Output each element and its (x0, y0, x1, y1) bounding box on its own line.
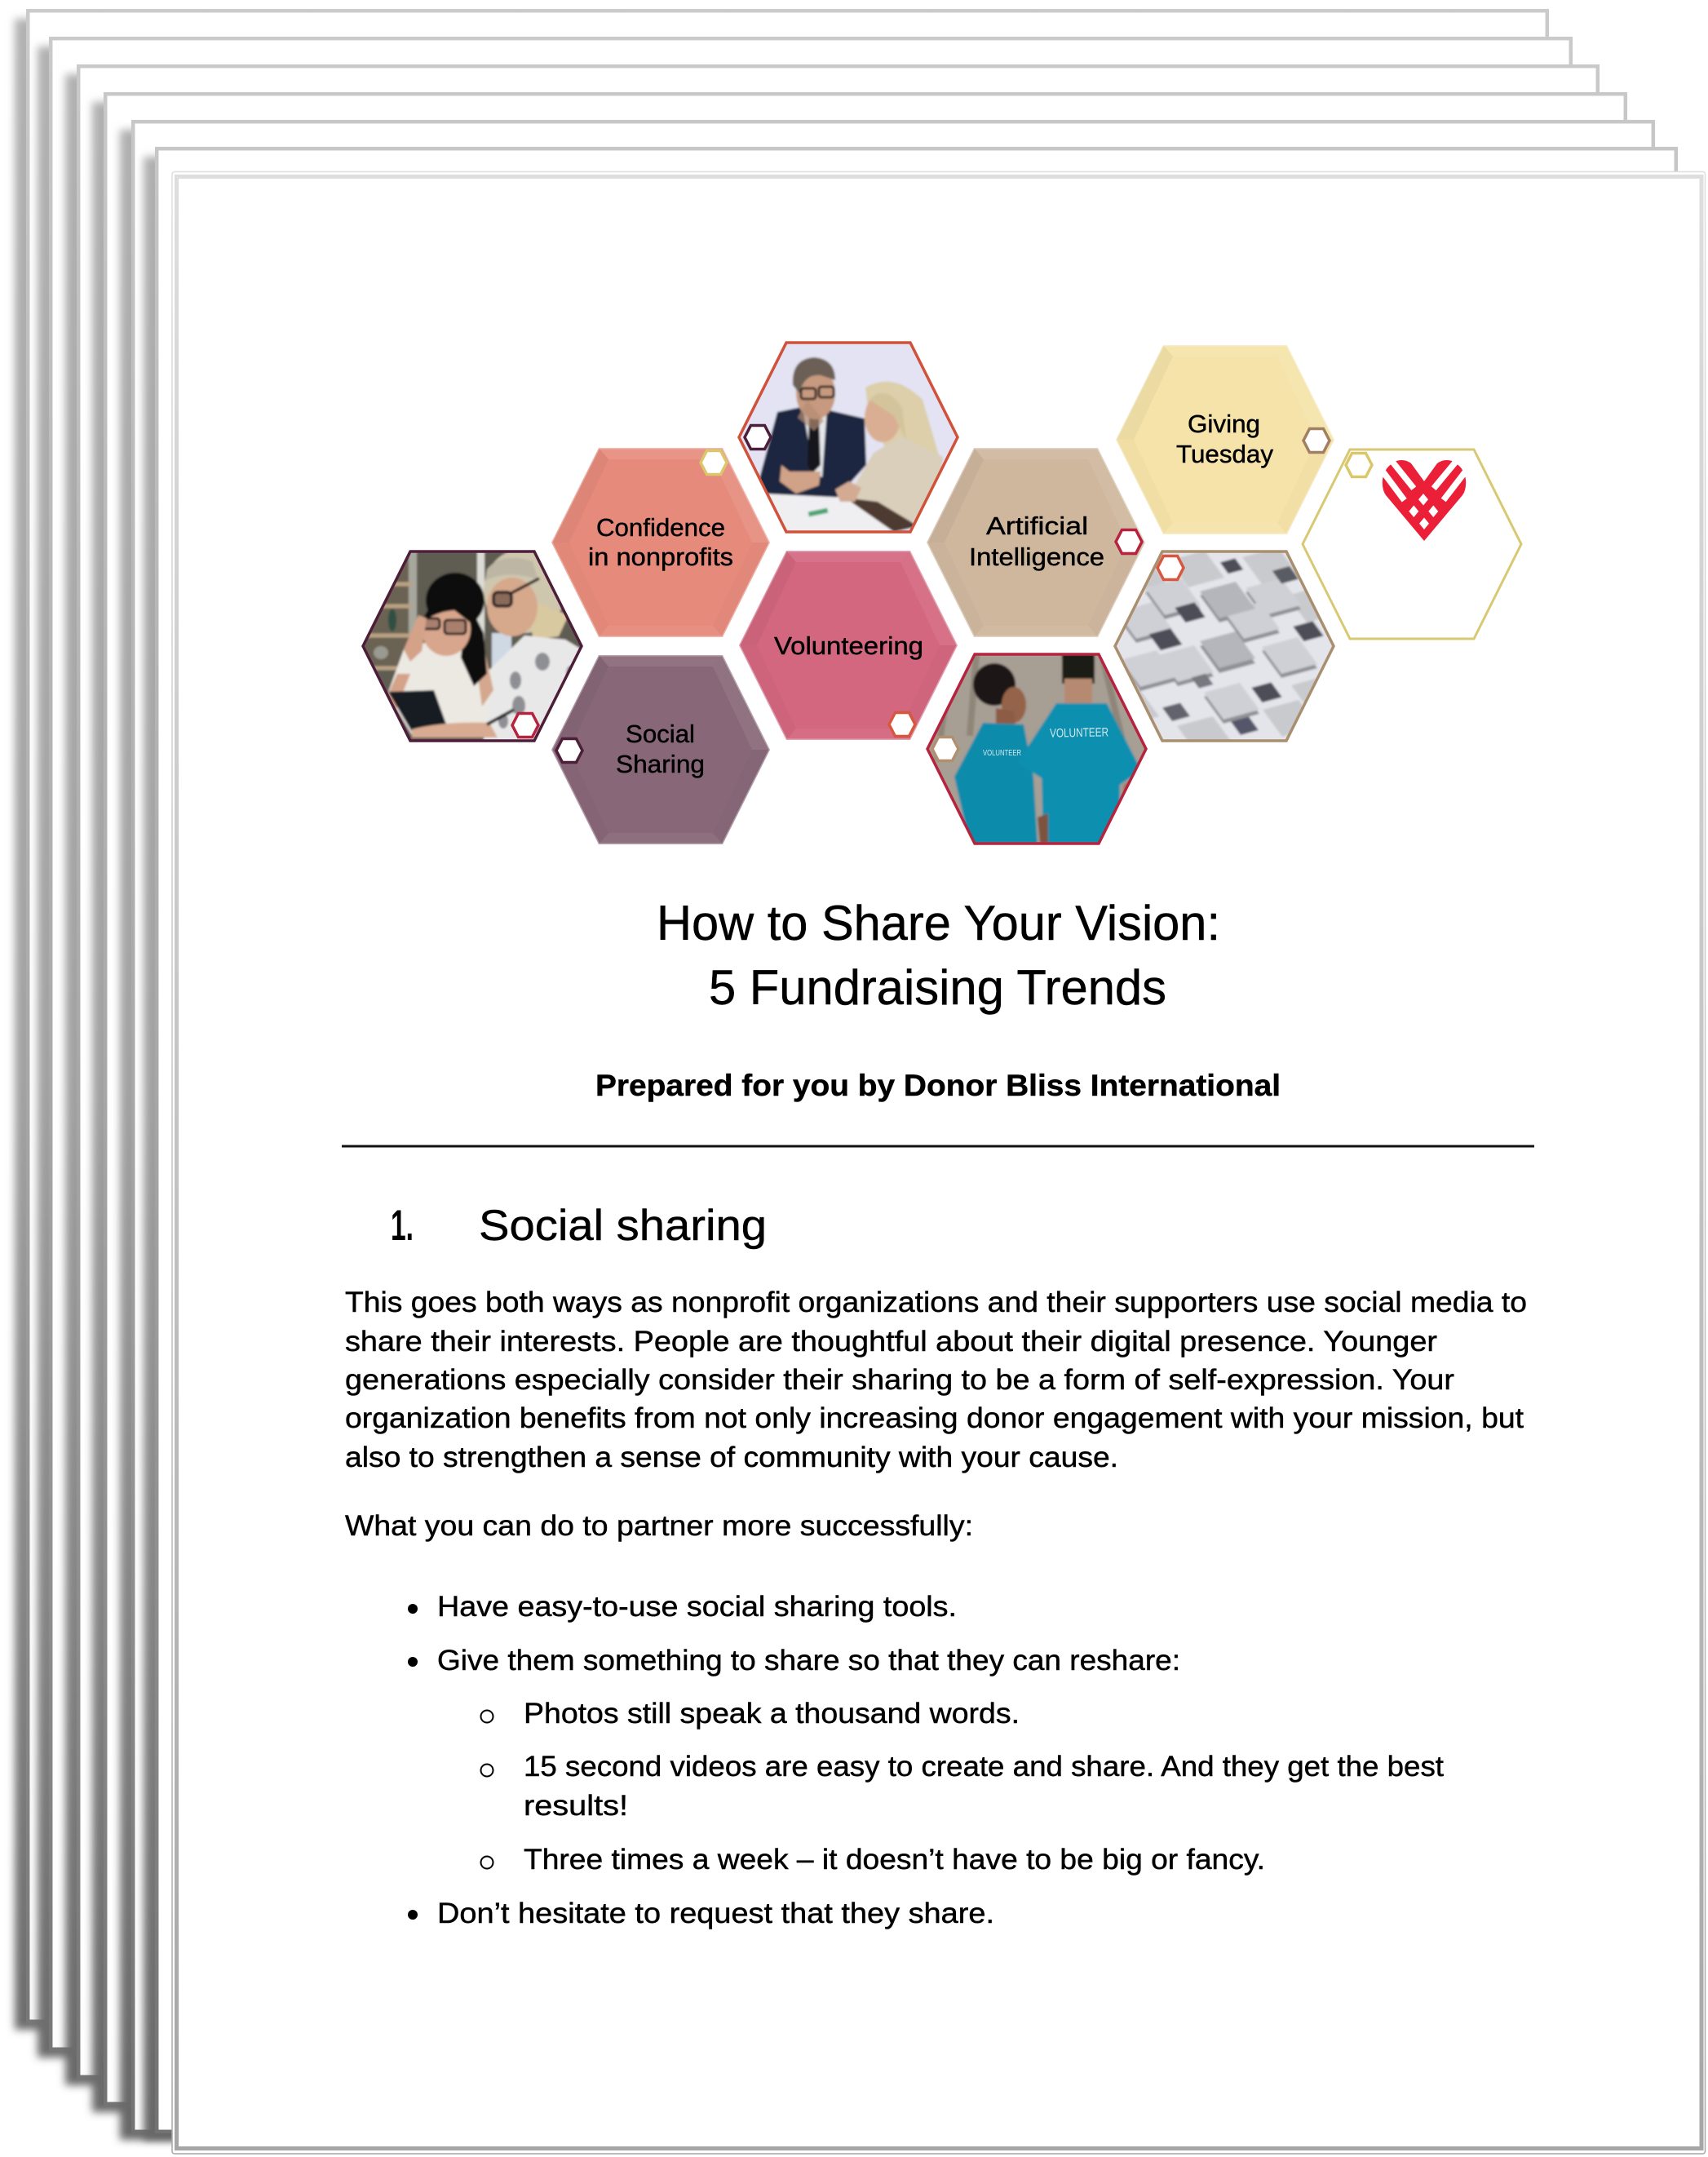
body paragraph: share their interests. People are thoughtful about their digital presence. Younger (345, 1326, 1437, 1358)
photo hexagon: man and woman in meeting (739, 343, 958, 532)
title (657, 896, 1220, 1015)
sub-bullet 1: Photos still speak a thousand words. (524, 1698, 1020, 1730)
photo hexagon: two women with tablet (363, 548, 582, 741)
hexagon: Volunteering (739, 551, 958, 740)
body paragraph: generations especially consider their sharing to be a form of self-expression. Your (345, 1364, 1454, 1396)
bullet list (408, 1591, 1444, 1929)
sub-bullet 3: Three times a week – it doesn’t have to be big or fancy. (524, 1844, 1265, 1876)
shirt text small: VOLUNTEER (983, 749, 1021, 758)
shirt text: VOLUNTEER (1050, 725, 1108, 741)
photo hexagon: computer chips (1113, 550, 1335, 742)
divider rule (342, 1145, 1534, 1147)
hexagon: Social Sharing (551, 655, 770, 844)
hexagon: Social Sharing: Sharing (616, 750, 705, 778)
hexagon: Confidence in nonprofits: Confidence (596, 513, 725, 542)
hexagon: Confidence in nonprofits (551, 448, 770, 637)
hexagon: Confidence in nonprofits: in nonprofits (588, 543, 733, 571)
body paragraph: organization benefits from not only increasing donor engagement with your mission, but (345, 1402, 1524, 1434)
section heading: Social sharing (479, 1202, 767, 1250)
subtitle: Prepared for you by Donor Bliss International (595, 1069, 1281, 1102)
title: How to Share Your Vision: (657, 896, 1220, 950)
logo hexagon: Giving Tuesday heart (1303, 450, 1521, 639)
hexagon: Volunteering: Volunteering (774, 631, 923, 660)
hexagon: Giving Tuesday (1116, 345, 1334, 534)
title: 5 Fundraising Trends (709, 960, 1166, 1015)
icon: lattice heart (1381, 458, 1467, 541)
bullet 2: Give them something to share so that they can reshare: (437, 1645, 1180, 1676)
bullet 1: Have easy-to-use social sharing tools. (437, 1591, 957, 1623)
hexagon: Giving Tuesday: Giving (1188, 410, 1260, 438)
body paragraph: This goes both ways as nonprofit organizations and their supporters use social media to (345, 1287, 1527, 1318)
sub-bullet 2 (481, 1751, 1444, 1822)
lead-in line: What you can do to partner more successfully: (345, 1510, 973, 1542)
bullet 3: Don’t hesitate to request that they share. (437, 1898, 994, 1929)
hexagon: Giving Tuesday: Tuesday (1176, 440, 1274, 468)
sub-bullet 2: 15 second videos are easy to create and share. And they get the best (524, 1751, 1444, 1783)
hexagon: Artificial Intelligence (927, 448, 1145, 637)
hexagon graphic (363, 343, 1521, 844)
hexagon: Artificial Intelligence: Artificial (986, 512, 1088, 540)
sub-bullet 2: results! (524, 1790, 628, 1822)
hexagon: Artificial Intelligence: Intelligence (969, 543, 1104, 571)
hexagon: Social Sharing: Social (626, 720, 695, 748)
section heading: 1. (391, 1202, 414, 1250)
body paragraph: also to strengthen a sense of community with your cause. (345, 1442, 1118, 1473)
body paragraph (345, 1287, 1527, 1473)
photo hexagon: two volunteers in blue shirts (927, 654, 1146, 844)
small hexagon connectors (512, 426, 1372, 762)
